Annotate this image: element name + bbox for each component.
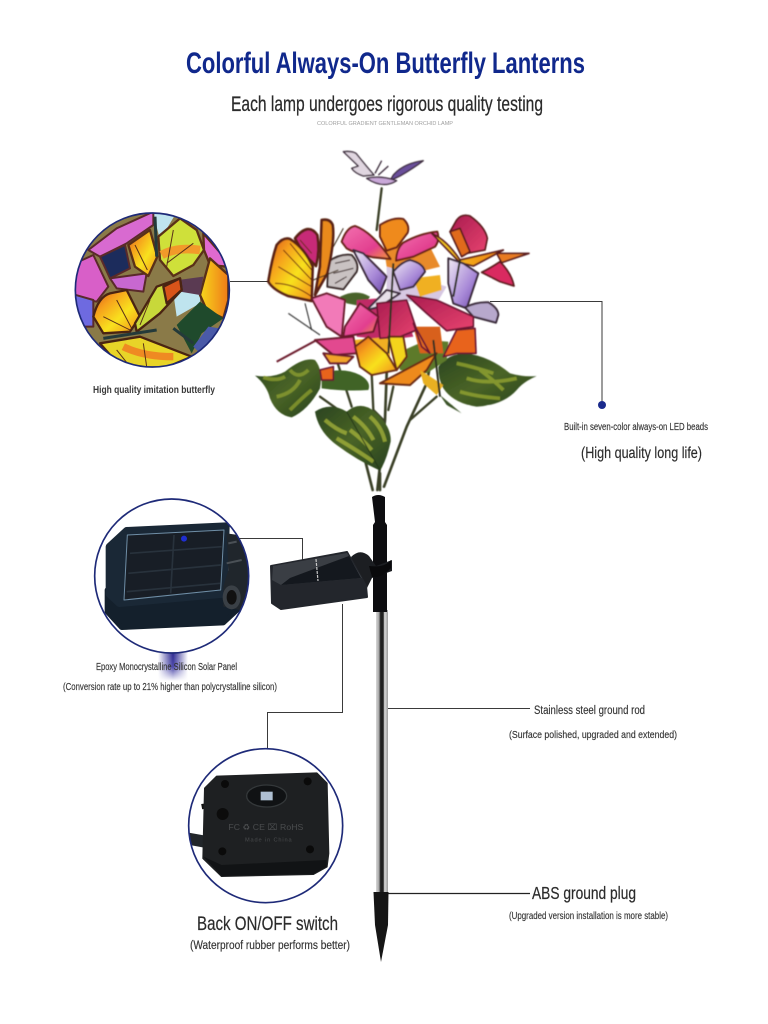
- ABS ground spike: [374, 892, 388, 962]
- caption: rod detail: (Surface polished, upgraded and extended): [509, 729, 677, 741]
- solar panel detail circle: [95, 499, 250, 653]
- cable grommet: [217, 808, 229, 820]
- leaf: [177, 302, 223, 353]
- solar cells: [124, 530, 224, 600]
- top-centre butterfly: [342, 218, 438, 261]
- caption: solar panel: Epoxy Monocrystalline Silicon Solar Panel: [96, 662, 237, 673]
- stainless steel rod: [376, 610, 388, 892]
- caption: plug detail: (Upgraded version installation is more stable): [509, 910, 668, 922]
- flower bouquet: [255, 151, 537, 490]
- left butterfly: [268, 220, 333, 301]
- large wings: [93, 278, 192, 370]
- caption: steel rod: Stainless steel ground rod: [534, 705, 645, 717]
- caption: LED beads: Built-in seven-color always-on LED beads: [564, 422, 708, 433]
- switch body: [203, 773, 328, 876]
- leaves: [255, 353, 537, 471]
- top butterfly: [343, 151, 423, 184]
- panel side: [107, 590, 241, 627]
- purple butterfly: [353, 250, 425, 310]
- blue smear under solar circle: [158, 653, 188, 681]
- pale right butterfly: [448, 258, 498, 323]
- switch recess: [247, 785, 287, 807]
- hinge bracket: [351, 552, 392, 590]
- connector lines: [230, 282, 602, 894]
- panel body: [271, 552, 367, 609]
- stems: [320, 188, 437, 490]
- yellow lower butterfly: [355, 337, 443, 395]
- crimson central wings: [320, 295, 476, 380]
- certification marks: FC ♻ CE ⌧ RoHS: [228, 822, 304, 832]
- lamp rod and spike: [372, 495, 388, 962]
- pink butterfly: [277, 293, 378, 363]
- yellow wings: [128, 218, 228, 318]
- connector: [223, 533, 250, 610]
- solar panel: [271, 552, 392, 609]
- sleeve strap: [369, 560, 391, 577]
- panel face: [272, 553, 362, 585]
- butterfly detail circle: [70, 210, 233, 370]
- right butterfly: [432, 215, 529, 286]
- screw holes: [221, 780, 229, 788]
- small tagline: COLORFUL GRADIENT GENTLEMAN ORCHID LAMP: [317, 121, 453, 127]
- on/off switch detail circle: [187, 749, 343, 903]
- caption: switch detail: (Waterproof rubber performs better): [190, 940, 350, 952]
- subtitle: Each lamp undergoes rigorous quality testing: [231, 93, 543, 116]
- cable: [187, 838, 205, 842]
- panel top: [109, 526, 226, 603]
- caption: ABS plug: ABS ground plug: [532, 883, 636, 903]
- blue dot: [181, 536, 187, 542]
- flower body stems: [388, 260, 460, 397]
- grey butterfly wing: [327, 255, 357, 289]
- black upper sleeve: [372, 495, 387, 612]
- pale sky patches: [153, 213, 200, 317]
- caption: long life: (High quality long life): [581, 445, 702, 462]
- caption: switch: Back ON/OFF switch: [197, 913, 338, 935]
- LED indicator dot: [598, 401, 606, 409]
- pink wings: [70, 212, 153, 327]
- made in china: Made in China: [245, 838, 293, 844]
- underlayer filling the bouquet centre: [340, 240, 448, 373]
- caption: butterfly: High quality imitation butterfly: [93, 385, 215, 396]
- title: Colorful Always-On Butterfly Lanterns: [186, 47, 585, 80]
- caption: conversion rate: (Conversion rate up to 21% higher than polycrystalline silicon): [63, 681, 277, 693]
